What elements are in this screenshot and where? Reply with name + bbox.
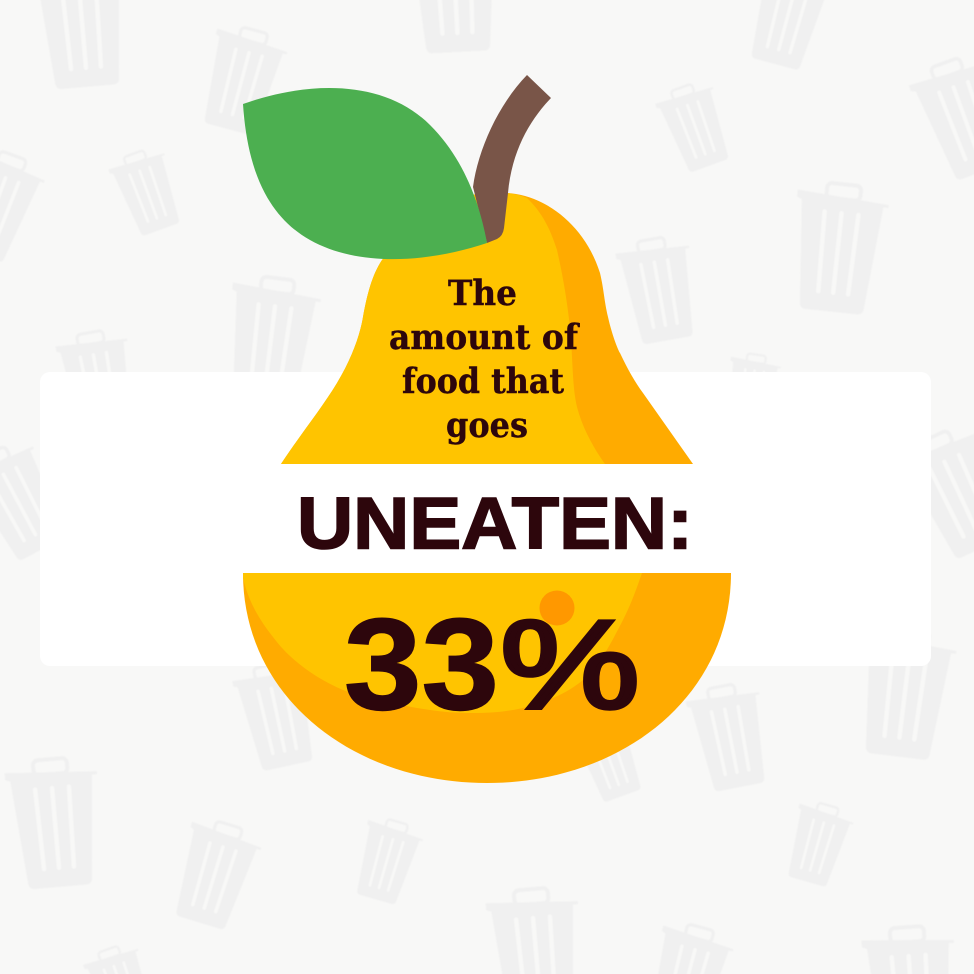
icon: small trash bin left	[106, 144, 188, 239]
icon: trash bin right edge	[906, 49, 974, 185]
icon: trash bin bottom right corner	[861, 924, 961, 974]
panel: white band	[40, 372, 931, 666]
icon: trash bin bottom edge	[639, 918, 737, 974]
icon: large trash bin right	[785, 180, 890, 316]
icon: trash bin upper left	[193, 21, 291, 139]
leaf	[243, 88, 487, 259]
pear upper shade	[281, 193, 693, 464]
icon: trash bin behind panel right	[722, 351, 782, 428]
pear lower body	[243, 573, 642, 713]
line: amount of: amount of	[389, 318, 580, 358]
icon: trash bin left of panel	[0, 434, 77, 567]
icon: trash bin below panel left	[231, 658, 324, 774]
pear dot	[540, 590, 574, 626]
icon: pear illustration	[243, 75, 731, 783]
icon: trash bin under panel right	[851, 624, 958, 762]
icon: trash bin behind pear left	[219, 273, 323, 407]
icon: trash bin right of pear base	[684, 680, 776, 794]
icon: large trash bin bottom left	[4, 755, 106, 891]
icon: trash bin bottom center	[485, 885, 587, 974]
stem	[473, 75, 551, 243]
icon: trash bin top right	[740, 0, 835, 73]
line: food that: food that	[402, 362, 564, 402]
icon: small trash bin bottom	[348, 814, 426, 907]
icon: trash bin bottom edge left	[81, 940, 162, 974]
percent sign: %	[500, 594, 640, 735]
heading: UNEATEN: UNEATEN:	[297, 484, 693, 564]
icon: trash bin right of panel	[893, 418, 974, 565]
icon: trash bin left edge	[0, 143, 49, 267]
icon: trash bin right of pear	[614, 233, 704, 347]
line: goes: goes	[446, 406, 528, 446]
pear lower shade	[243, 573, 731, 783]
digits: 33: 33	[344, 591, 499, 737]
icon: small trash bin lower right	[779, 798, 856, 890]
text: intro sentence	[389, 274, 580, 446]
icon: small trash bin upper right	[653, 77, 738, 176]
statistic: 33%	[344, 591, 640, 737]
line: The: The	[448, 274, 517, 314]
pear upper body	[281, 193, 605, 464]
icon: trash bin top center	[406, 0, 504, 54]
icon: trash bin bottom	[165, 814, 265, 933]
icon: trash bin behind panel left	[54, 326, 142, 437]
icon: trash bin top left	[31, 0, 133, 91]
icon: trash bin behind pear base	[569, 712, 650, 806]
